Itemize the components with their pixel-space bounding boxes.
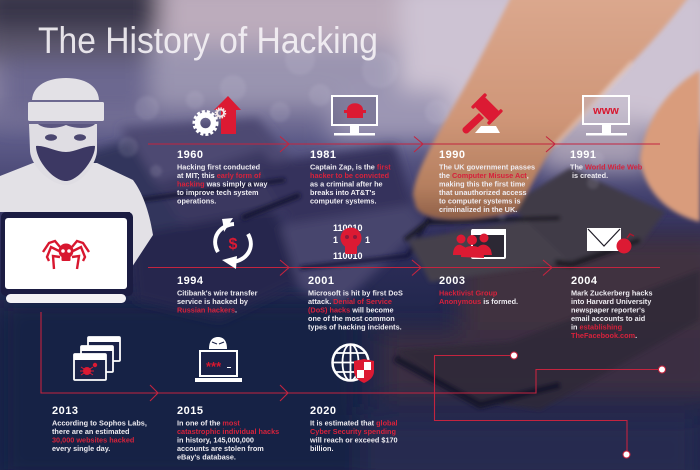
- timeline row 1: [148, 136, 660, 152]
- 2003 text: 2003: [439, 275, 465, 287]
- 1991 text: is created.: [572, 171, 608, 180]
- 2003 text: [439, 275, 518, 306]
- 2015 text: accounts are stolen from: [177, 444, 264, 453]
- 1981 text: 1981: [310, 149, 336, 161]
- 2004 text: [571, 275, 653, 340]
- icon: envelope and bomb: [587, 228, 634, 254]
- 1990 text: that unauthorized access: [439, 188, 527, 197]
- 2001 text: 2001: [308, 275, 334, 287]
- icon: dollar cycle: $: [229, 236, 238, 253]
- 1960 text: to improve tech system: [177, 188, 259, 197]
- laptop: [1, 212, 133, 296]
- 2003 text: Anonymous is formed.: [439, 297, 518, 306]
- 2001 text: attack. Denial of Service: [308, 297, 392, 306]
- 2001 text: Microsoft is hit by first DoS: [308, 288, 403, 298]
- 2020 text: [309, 405, 398, 453]
- 1990 text: making this the first time: [439, 180, 525, 188]
- finger: [413, 0, 690, 220]
- 1990 text: to computer systems is: [439, 196, 521, 206]
- 2003 text: Hacktivist Group: [439, 288, 498, 298]
- 1981 text: hacker to be convicted: [310, 171, 389, 180]
- 1960 text: hacking was simply a way: [177, 180, 268, 188]
- bokeh: [118, 45, 604, 221]
- icon: globe and shield: [332, 344, 374, 383]
- 1960 text: operations.: [177, 196, 216, 206]
- 2015 text: in history, 145,000,000: [177, 436, 254, 444]
- 2020 text: billion.: [310, 444, 334, 453]
- 1994 text: Russian hackers.: [177, 306, 237, 314]
- 1994 text: Citibank's wire transfer: [177, 288, 258, 298]
- title: The History of Hacking: [38, 20, 378, 61]
- icon: www monitor: [583, 96, 629, 136]
- timeline row 3 with circuit branch: [41, 312, 662, 401]
- icon: binary code with skull: 1: [365, 235, 370, 245]
- 1990 text: the Computer Misuse Act,: [439, 171, 529, 180]
- 2004 text: email accounts to aid: [571, 314, 645, 323]
- 2013 text: every single day.: [52, 444, 110, 453]
- 2004 text: TheFacebook.com.: [571, 331, 637, 340]
- icon: gavel: [462, 93, 503, 134]
- 2020 text: 2020: [310, 405, 336, 417]
- 1990 text: [439, 149, 535, 214]
- circuit branch: [434, 352, 666, 458]
- icon: binary code with skull: [333, 223, 370, 261]
- icon: hacker at laptop: [195, 337, 242, 382]
- 2015 text: In one of the most: [177, 418, 240, 428]
- icon: binary code with skull: 110010: [333, 251, 363, 261]
- 1960 text: 1960: [177, 149, 203, 161]
- 2020 text: It is estimated that global: [310, 418, 398, 428]
- 1991 text: The World Wide Web: [570, 162, 643, 172]
- 2001 text: one of the most common: [308, 314, 395, 323]
- 2004 text: 2004: [571, 275, 598, 287]
- 1981 text: [310, 149, 391, 206]
- 1981 text: Captain Zap, is the first: [310, 162, 391, 172]
- icon: hacker at laptop: ***: [206, 359, 222, 374]
- icon: binary code with skull: 110010: [333, 223, 363, 233]
- 1994 text: [177, 275, 258, 314]
- 2015 text: catastrophic individual hacks: [177, 427, 279, 436]
- icon: www monitor: www: [592, 105, 619, 117]
- 2004 text: newspaper reporter's: [571, 306, 645, 314]
- 1981 text: as a criminal after he: [310, 180, 383, 188]
- 2020 text: Cyber Security spending: [310, 427, 396, 436]
- icon: group with browser window: [453, 229, 506, 258]
- icon: monitor with hacker: [332, 96, 377, 136]
- 2015 text: [177, 405, 279, 462]
- icon: gears and arrow: [194, 96, 241, 134]
- 1981 text: computer systems.: [310, 196, 377, 206]
- 1994 text: 1994: [177, 275, 204, 287]
- 1990 text: The UK government passes: [439, 162, 535, 172]
- icon: dollar cycle: [215, 218, 251, 269]
- 2013 text: there are an estimated: [52, 427, 129, 436]
- 2015 text: eBay's database.: [177, 452, 236, 462]
- 2004 text: in establishing: [571, 322, 622, 332]
- 1990 text: 1990: [439, 149, 465, 161]
- 2004 text: into Harvard University: [571, 297, 652, 306]
- icon: spider skull: [43, 241, 89, 269]
- hacker body: [0, 163, 153, 270]
- 1990 text: criminalized in the UK.: [439, 205, 517, 214]
- 2013 text: 2013: [52, 405, 78, 417]
- 2001 text: [308, 275, 403, 332]
- 1994 text: service is hacked by: [177, 297, 249, 306]
- hacker figure with laptop: [0, 78, 153, 303]
- 1991 text: 1991: [570, 149, 596, 161]
- 2001 text: (DoS) hacks will become: [308, 306, 394, 314]
- timeline row 2: [148, 260, 660, 276]
- 2020 text: will reach or exceed $170: [309, 436, 398, 444]
- 1981 text: breaks into AT&T's: [310, 188, 375, 197]
- 1960 text: [177, 149, 268, 206]
- 1960 text: Hacking first conducted: [177, 162, 260, 172]
- 2013 text: 30,000 websites hacked: [52, 436, 134, 444]
- icon: binary code with skull: 1: [333, 235, 338, 245]
- 2013 text: According to Sophos Labs,: [52, 418, 147, 428]
- 2015 text: 2015: [177, 405, 203, 417]
- hacker mask and face: [29, 124, 97, 185]
- hacker cap: [32, 78, 99, 100]
- icon: stacked browser windows with bug: [74, 337, 120, 380]
- 1991 text: [570, 149, 643, 180]
- 2001 text: types of hacking incidents.: [308, 322, 402, 332]
- 1960 text: at MIT; this early form of: [177, 171, 262, 180]
- keys: [60, 118, 425, 320]
- 2004 text: Mark Zuckerberg hacks: [571, 288, 653, 298]
- 2013 text: [52, 405, 147, 453]
